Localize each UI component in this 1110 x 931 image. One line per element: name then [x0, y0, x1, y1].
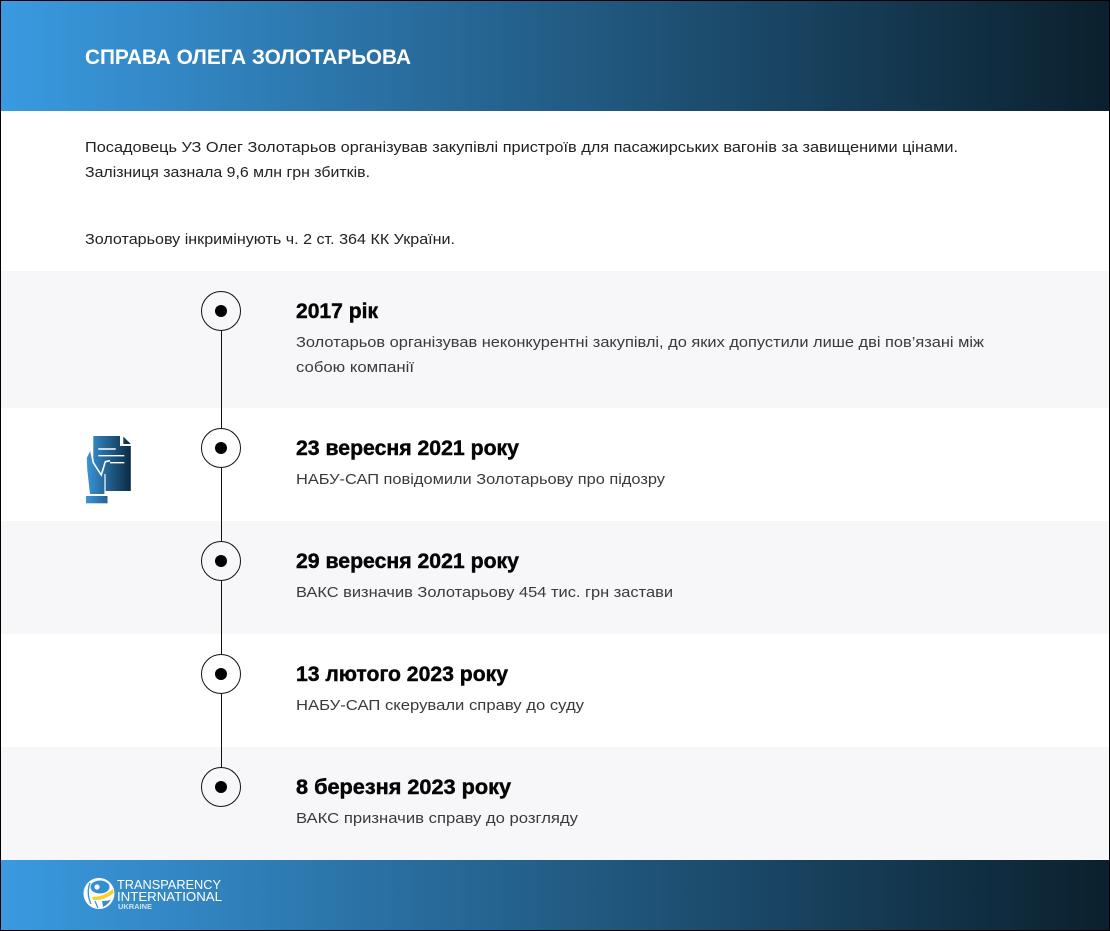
event: 29 September 2021: 29 вересня 2021 року: [296, 550, 519, 573]
event: 8 March 2023: ВАКС призначив справу до розгляду: [296, 810, 579, 827]
timeline marker: 29 September 2021: [202, 542, 240, 580]
event: 13 February 2023: 13 лютого 2023 року: [296, 663, 508, 686]
event: 8 March 2023: [296, 776, 579, 827]
event: 2017: [296, 300, 984, 376]
logo: Transparency International Ukraine: INTERNATIONAL: [117, 889, 222, 904]
logo: Transparency International Ukraine: [84, 877, 222, 911]
timeline marker: 13 February 2023: [202, 654, 240, 694]
footer banner: [1, 860, 1109, 930]
header banner: [1, 1, 1109, 111]
icon: hand holding document: [86, 436, 131, 503]
timeline axis line: [220, 311, 222, 787]
event: 29 September 2021: [296, 550, 673, 601]
timeline marker: 23 September 2021: [202, 428, 240, 468]
timeline marker: 8 March 2023: [202, 768, 240, 806]
event: 23 September 2021: 23 вересня 2021 року: [296, 437, 519, 460]
logo: Transparency International Ukraine: UKRAINE: [118, 904, 152, 911]
title: СПРАВА ОЛЕГА ЗОЛОТАРЬОВА: [85, 46, 411, 69]
event: 2017: Золотарьов організував неконкурентні закупівлі, до яких допустили лише дві пов’язані між: [296, 334, 984, 351]
event: 2017: 2017 рік: [296, 300, 378, 323]
intro text: Посадовець УЗ Олег Золотарьов організував закупівлі пристроїв для пасажирських вагонів за завищеними цінами.: [85, 139, 958, 156]
intro text: [85, 139, 958, 248]
event: 29 September 2021: ВАКС визначив Золотарьову 454 тис. грн застави: [296, 584, 673, 601]
event: 23 September 2021: НАБУ-САП повідомили Золотарьову про підозру: [296, 471, 666, 488]
event: 8 March 2023: 8 березня 2023 року: [296, 776, 511, 799]
intro text: Залізниця зазнала 9,6 млн грн збитків.: [85, 164, 370, 181]
event: 13 February 2023: [296, 663, 585, 714]
timeline marker: 2017: [202, 292, 240, 330]
intro text: Золотарьову інкримінують ч. 2 ст. 364 КК України.: [85, 231, 455, 248]
event: 23 September 2021: [296, 437, 666, 488]
event: 2017: собою компанії: [296, 359, 415, 376]
logo: Transparency International Ukraine: TRANSPARENCY: [117, 877, 221, 892]
timeline bands: [1, 271, 1109, 860]
event: 13 February 2023: НАБУ-САП скерували справу до суду: [296, 697, 585, 714]
